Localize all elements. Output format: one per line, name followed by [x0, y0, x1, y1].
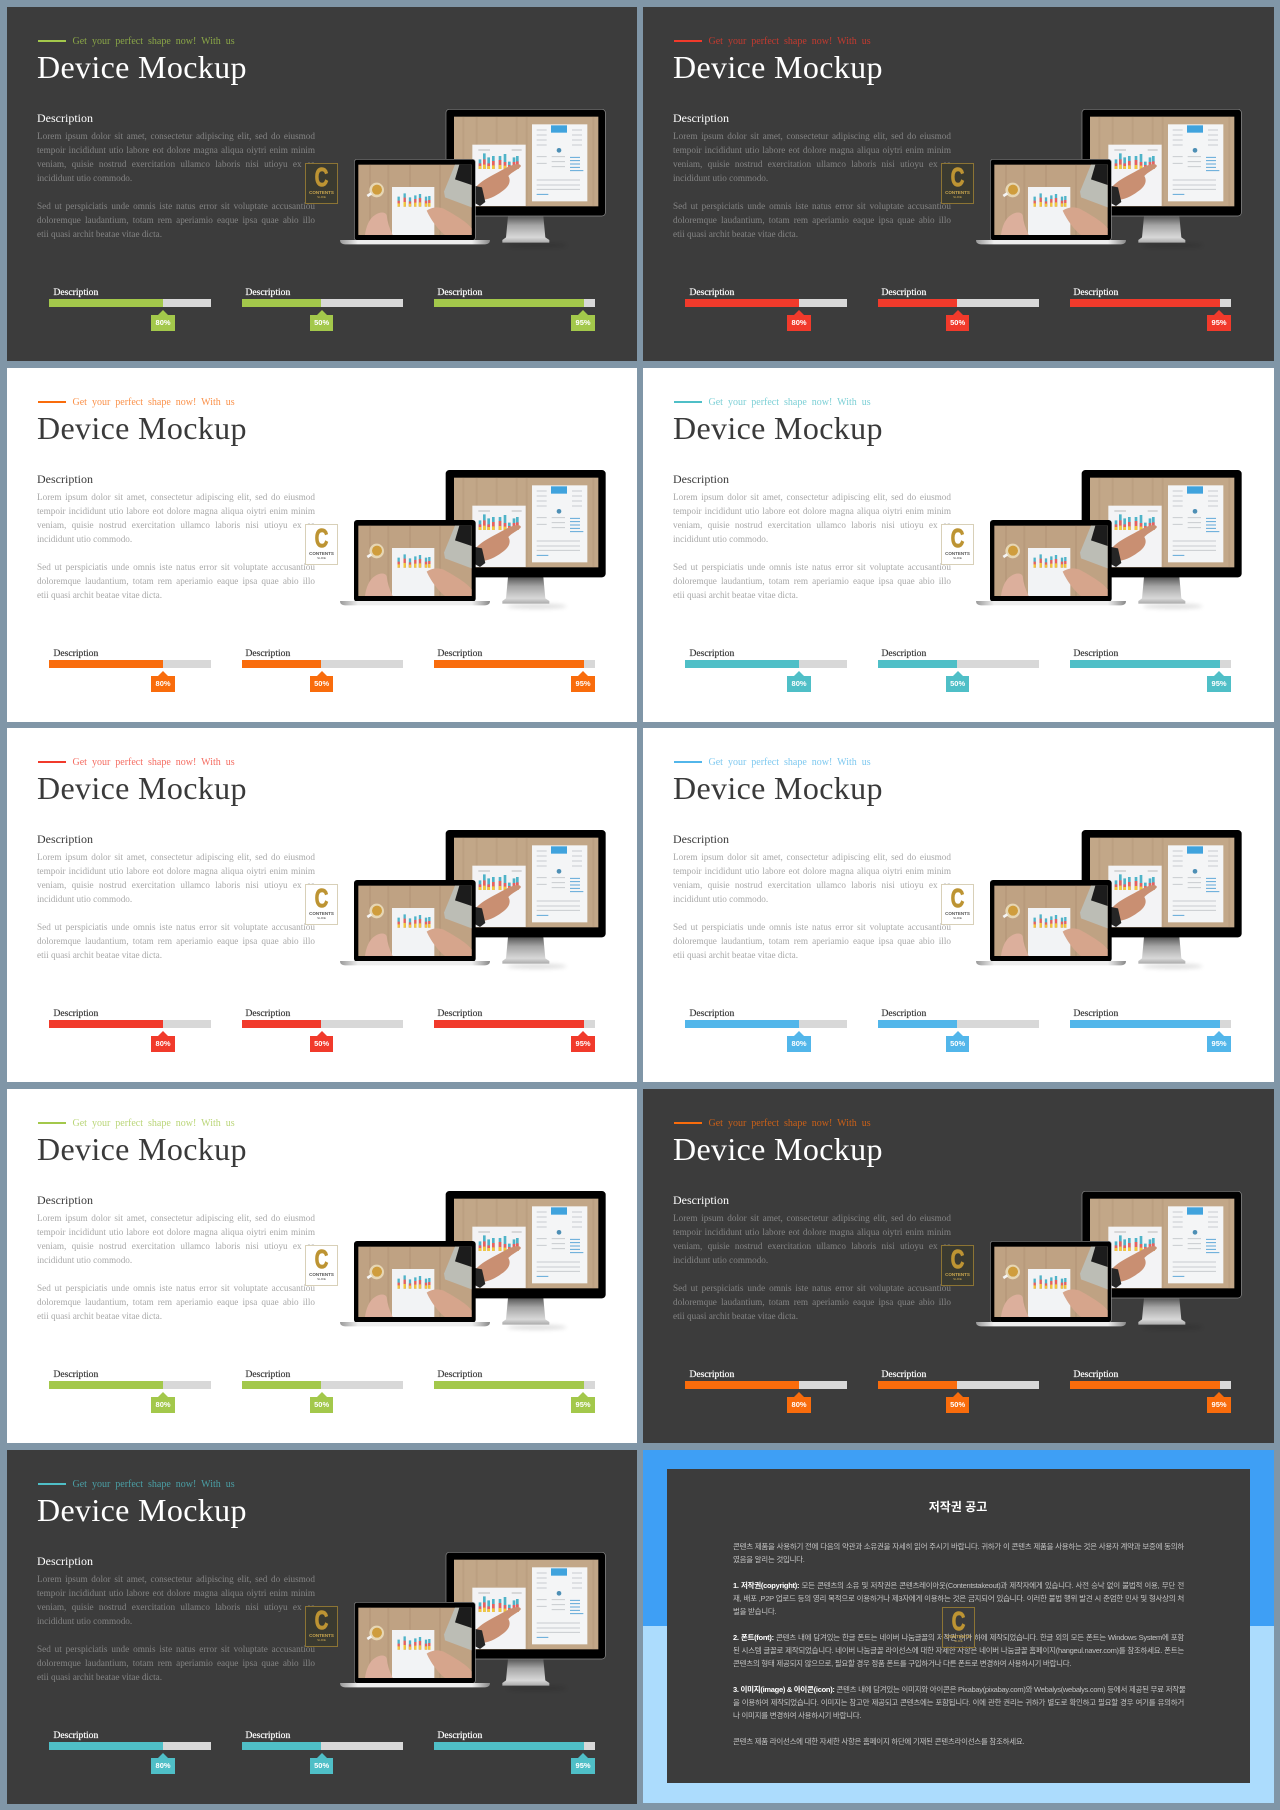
- bar label 2: Description: [882, 1368, 926, 1380]
- logo: [305, 884, 338, 925]
- body text: doloremque laudantium, totam rem aperiamio eaque ipsa quae abio illo: [37, 576, 315, 586]
- body text: Lorem ipsum dolor sit amet, consectetur adipiscing elit, sed do eiusmod: [673, 492, 951, 502]
- logo: CONTENTS: [945, 1272, 970, 1277]
- bar label 3: Description: [1074, 1368, 1118, 1380]
- value tag 3: [571, 1036, 595, 1052]
- logo: [305, 163, 338, 204]
- accent line: [38, 1483, 66, 1485]
- value tag 2: [946, 1397, 969, 1413]
- logo: [942, 1607, 975, 1648]
- progress bar 3: [1070, 1381, 1231, 1389]
- progress bar 2: [242, 660, 403, 668]
- slide 3: white orange: [7, 368, 637, 722]
- value tag 3: 95%: [1212, 1400, 1227, 1409]
- description heading: Description: [673, 111, 729, 125]
- progress bar 3: [1070, 1020, 1231, 1028]
- title: Device Mockup: [673, 1131, 883, 1167]
- body text: Sed ut perspiciatis unde omnis iste natus error sit voluptate accusantiou: [673, 562, 951, 572]
- description heading: Description: [37, 111, 93, 125]
- bar label 2: Description: [246, 648, 290, 658]
- body text: [673, 131, 951, 239]
- logo: C: [315, 1605, 328, 1635]
- notice intro: [733, 1542, 1184, 1564]
- value tag 1: 80%: [156, 1400, 171, 1409]
- logo: CONTENTS: [945, 551, 970, 556]
- notice font paragraph: 콘텐츠의 형태 제공되지 않으므로, 필요할 경우 정품 폰트를 구입하거나 다른 폰트로 변경하여 사용하시기 바랍니다.: [733, 1659, 1071, 1668]
- tagline: Get your perfect shape now! With us: [72, 756, 235, 768]
- logo: CONTENTS: [309, 911, 334, 916]
- logo: C: [315, 523, 328, 553]
- body text: incididunt utio commodo.: [37, 173, 132, 183]
- body text: Lorem ipsum dolor sit amet, consectetur adipiscing elit, sed do eiusmod: [37, 1213, 315, 1223]
- value tag 1: [151, 315, 175, 331]
- value tag 1: 80%: [792, 318, 807, 327]
- value tag 2: [946, 1036, 969, 1052]
- value tag 3: 95%: [576, 679, 591, 688]
- bar label 2: Description: [246, 286, 290, 298]
- accent line: [38, 401, 66, 403]
- body text: tempoir incididunt utio labore eot dolore magna aliqua oiytri enim minim: [37, 1588, 315, 1598]
- logo: C: [951, 1244, 964, 1274]
- body text: tempoir incididunt utio labore eot dolore magna aliqua oiytri enim minim: [37, 1227, 315, 1237]
- title: Device Mockup: [673, 410, 883, 446]
- tagline: Get your perfect shape now! With us: [708, 396, 871, 408]
- value tag 3: 95%: [576, 1400, 591, 1409]
- body text: etii quasi archit beatae vitae dicta.: [673, 950, 798, 960]
- body text: etii quasi archit beatae vitae dicta.: [37, 1311, 162, 1321]
- value tag 1: 80%: [792, 1039, 807, 1048]
- body text: tempoir incididunt utio labore eot dolore magna aliqua oiytri enim minim: [673, 145, 951, 155]
- bar label 1: Description: [54, 286, 98, 298]
- body text: veniam, quisie nostrud exercitation ullamco laboris nisi utioyu ex ea: [37, 1241, 315, 1251]
- logo: CONTENTS: [309, 1633, 334, 1638]
- body text: doloremque laudantium, totam rem aperiamio eaque ipsa quae abio illo: [37, 1658, 315, 1668]
- body text: Sed ut perspiciatis unde omnis iste natus error sit voluptate accusantiou: [37, 562, 315, 572]
- icon: devices mockup: [340, 109, 606, 244]
- slide 9: dark teal: [7, 1450, 637, 1804]
- body text: [37, 1574, 315, 1682]
- bar label 1: Description: [54, 648, 98, 658]
- slide 1: dark green: [7, 7, 637, 361]
- slide 5: white red: [7, 728, 637, 1082]
- value tag 3: 95%: [1212, 1039, 1227, 1048]
- tagline: Get your perfect shape now! With us: [72, 396, 235, 408]
- body text: tempoir incididunt utio labore eot dolore magna aliqua oiytri enim minim: [37, 145, 315, 155]
- logo: [305, 1245, 338, 1286]
- value tag 3: [571, 1758, 595, 1774]
- accent line: [674, 40, 702, 42]
- body text: veniam, quisie nostrud exercitation ullamco laboris nisi utioyu ex ea: [673, 159, 951, 169]
- bar label 1: Description: [690, 286, 734, 298]
- logo: CONTENTS: [946, 1634, 971, 1639]
- bar label 3: Description: [1074, 1008, 1118, 1018]
- notice copyright paragraph: 벌을 받습니다.: [733, 1607, 776, 1616]
- body text: etii quasi archit beatae vitae dicta.: [673, 229, 798, 239]
- progress bar 2: [242, 1742, 403, 1750]
- value tag 3: 95%: [576, 1761, 591, 1770]
- notice font paragraph: 된 시스템 글꼴로 제작되었습니다. 네이버 나눔글꼴 라이선스에 대한 자세한 사항은 네이버 나눔글꼴 홈페이지(hangeul.naver.com)를 참조하세요. 폰트는: [733, 1646, 1184, 1655]
- notice intro: 콘텐츠 제품을 사용하기 전에 다음의 약관과 소유권을 자세히 읽어 주시기 바랍니다. 귀하가 이 콘텐츠 제품을 사용하는 것은 사용자 계약과 보증에 동의하: [733, 1542, 1184, 1551]
- body text: doloremque laudantium, totam rem aperiamio eaque ipsa quae abio illo: [37, 1297, 315, 1307]
- value tag 2: [310, 1036, 333, 1052]
- bar label 3: Description: [438, 1008, 482, 1018]
- body text: veniam, quisie nostrud exercitation ullamco laboris nisi utioyu ex ea: [37, 1602, 315, 1612]
- tagline: Get your perfect shape now! With us: [72, 1118, 235, 1128]
- progress bar 3: [434, 299, 595, 307]
- body text: incididunt utio commodo.: [37, 1616, 132, 1626]
- body text: tempoir incididunt utio labore eot dolore magna aliqua oiytri enim minim: [673, 1227, 951, 1237]
- value tag 1: 80%: [792, 679, 807, 688]
- value tag 2: 50%: [314, 1400, 329, 1409]
- notice license line: 콘텐츠 제품 라이선스에 대한 자세한 사항은 홈페이지 하단에 기재된 콘텐츠라이선스를 참조하세요.: [733, 1737, 1024, 1746]
- slide 8: dark orange: [643, 1089, 1274, 1443]
- value tag 3: 95%: [576, 1039, 591, 1048]
- logo: C: [315, 1244, 328, 1274]
- description heading: Description: [37, 472, 93, 486]
- value tag 1: [787, 1036, 811, 1052]
- value tag 2: [946, 315, 969, 331]
- logo: CONTENTS: [945, 911, 970, 916]
- body text: Lorem ipsum dolor sit amet, consectetur adipiscing elit, sed do eiusmod: [37, 852, 315, 862]
- icon: devices mockup: [976, 109, 1242, 244]
- progress bar 1: [685, 1020, 847, 1028]
- description heading: Description: [37, 1554, 93, 1568]
- notice font paragraph: [733, 1633, 1184, 1668]
- logo: C: [951, 523, 964, 553]
- logo: [305, 524, 338, 565]
- progress bar 1: [49, 660, 211, 668]
- logo: [941, 884, 974, 925]
- value tag 2: [310, 315, 333, 331]
- progress bar 1: [685, 660, 847, 668]
- accent line: [38, 1122, 66, 1124]
- value tag 2: 50%: [314, 1039, 329, 1048]
- value tag 3: [1207, 315, 1231, 331]
- body text: etii quasi archit beatae vitae dicta.: [37, 590, 162, 600]
- bar label 1: Description: [690, 1368, 734, 1380]
- body text: Sed ut perspiciatis unde omnis iste natus error sit voluptate accusantiou: [673, 922, 951, 932]
- body text: doloremque laudantium, totam rem aperiamio eaque ipsa quae abio illo: [673, 936, 951, 946]
- progress bar 1: [49, 1381, 211, 1389]
- body text: veniam, quisie nostrud exercitation ullamco laboris nisi utioyu ex ea: [673, 880, 951, 890]
- title: Device Mockup: [673, 770, 883, 806]
- progress bar 2: [242, 1381, 403, 1389]
- title: Device Mockup: [37, 49, 247, 85]
- body text: etii quasi archit beatae vitae dicta.: [673, 1311, 798, 1321]
- body text: incididunt utio commodo.: [673, 534, 768, 544]
- body text: Sed ut perspiciatis unde omnis iste natus error sit voluptate accusantiou: [37, 922, 315, 932]
- body text: incididunt utio commodo.: [37, 534, 132, 544]
- accent line: [38, 40, 66, 42]
- description heading: Description: [673, 832, 729, 846]
- logo: C: [315, 883, 328, 913]
- title: Device Mockup: [37, 1131, 247, 1167]
- body text: veniam, quisie nostrud exercitation ullamco laboris nisi utioyu ex ea: [673, 520, 951, 530]
- body text: [673, 492, 951, 600]
- value tag 1: 80%: [156, 1761, 171, 1770]
- body text: incididunt utio commodo.: [673, 173, 768, 183]
- accent line: [38, 761, 66, 763]
- description heading: Description: [37, 1193, 93, 1207]
- value tag 1: 80%: [156, 318, 171, 327]
- bar label 2: Description: [246, 1008, 290, 1018]
- body text: [37, 852, 315, 960]
- value tag 1: [151, 1397, 175, 1413]
- bar label 2: Description: [882, 286, 926, 298]
- logo: SLIDE: [317, 195, 326, 199]
- logo: CONTENTS: [309, 551, 334, 556]
- icon: devices mockup: [340, 470, 606, 610]
- progress bar 1: [685, 299, 847, 307]
- body text: Sed ut perspiciatis unde omnis iste natus error sit voluptate accusantiou: [673, 201, 951, 211]
- value tag 2: 50%: [950, 679, 965, 688]
- logo: SLIDE: [317, 916, 326, 920]
- body text: etii quasi archit beatae vitae dicta.: [673, 590, 798, 600]
- tagline: Get your perfect shape now! With us: [708, 36, 871, 46]
- icon: devices mockup: [976, 830, 1242, 970]
- notice font paragraph: 2. 폰트(font): 콘텐츠 내에 담겨있는 한글 폰트는 네이버 나눔글꼴의 저작권 허가 하에 제작되었습니다. 한글 외의 모든 폰트는 Windows System에 포함: [733, 1633, 1184, 1642]
- panel: notice: [667, 1469, 1250, 1783]
- title: Device Mockup: [37, 770, 247, 806]
- icon: devices mockup: [976, 470, 1242, 610]
- slide 2: dark red: [643, 7, 1274, 361]
- body text: incididunt utio commodo.: [37, 894, 132, 904]
- body text: incididunt utio commodo.: [673, 1255, 768, 1265]
- progress bar 2: [242, 299, 403, 307]
- slide 6: white sky blue: [643, 728, 1274, 1082]
- progress bar 1: [49, 299, 211, 307]
- value tag 2: [310, 676, 333, 692]
- body text: doloremque laudantium, totam rem aperiamio eaque ipsa quae abio illo: [673, 1297, 951, 1307]
- bar label 3: Description: [438, 1368, 482, 1380]
- progress bar 3: [434, 1020, 595, 1028]
- bar label 3: Description: [438, 648, 482, 658]
- body text: doloremque laudantium, totam rem aperiamio eaque ipsa quae abio illo: [37, 215, 315, 225]
- progress bar 1: [685, 1381, 847, 1389]
- bar label 1: Description: [54, 1730, 98, 1740]
- progress bar 1: [49, 1742, 211, 1750]
- tagline: Get your perfect shape now! With us: [708, 756, 871, 768]
- body text: doloremque laudantium, totam rem aperiamio eaque ipsa quae abio illo: [673, 576, 951, 586]
- body text: etii quasi archit beatae vitae dicta.: [37, 1672, 162, 1682]
- body text: Lorem ipsum dolor sit amet, consectetur adipiscing elit, sed do eiusmod: [37, 492, 315, 502]
- bar label 2: Description: [882, 648, 926, 658]
- value tag 1: [151, 1758, 175, 1774]
- body text: Sed ut perspiciatis unde omnis iste natus error sit voluptate accusantiou: [37, 1644, 315, 1654]
- bar label 3: Description: [1074, 286, 1118, 298]
- notice copyright paragraph: 1. 저작권(copyright): 모든 콘텐츠의 소유 및 저작권은 콘텐츠레이아웃(Contentstakeout)과 제작자에게 있습니다. 사전 승낙 없이 불법적 이용, 무단 전: [733, 1581, 1184, 1590]
- value tag 2: [946, 676, 969, 692]
- value tag 1: [787, 315, 811, 331]
- logo: SLIDE: [953, 556, 962, 560]
- logo: C: [315, 162, 328, 192]
- body text: incididunt utio commodo.: [673, 894, 768, 904]
- logo: [941, 524, 974, 565]
- notice image paragraph: 3. 이미지(image) & 아이콘(icon): 콘텐츠 내에 담겨있는 이미지와 아이콘은 Pixabay(pixabay.com)와 Webalys(webalys.com) 등에서 제공된 무료 저작물: [733, 1685, 1185, 1694]
- progress bar 2: [878, 1381, 1039, 1389]
- body text: [37, 1213, 315, 1321]
- value tag 3: [571, 1397, 595, 1413]
- body text: veniam, quisie nostrud exercitation ullamco laboris nisi utioyu ex ea: [37, 880, 315, 890]
- body text: tempoir incididunt utio labore eot dolore magna aliqua oiytri enim minim: [37, 866, 315, 876]
- value tag 3: [1207, 1397, 1231, 1413]
- body text: tempoir incididunt utio labore eot dolore magna aliqua oiytri enim minim: [673, 506, 951, 516]
- logo: SLIDE: [317, 1277, 326, 1281]
- body text: veniam, quisie nostrud exercitation ullamco laboris nisi utioyu ex ea: [37, 520, 315, 530]
- bar label 1: Description: [690, 1008, 734, 1018]
- icon: devices mockup: [340, 1552, 606, 1688]
- notice copyright paragraph: 재, 배포 ,P2P 업로드 등의 영리 목적으로 이용하거나 제3자에게 이용하는 것은 금지되어 있습니다. 이러한 불법 행위 발견 시 준엄한 민사 및 형사상의 처: [733, 1594, 1184, 1603]
- progress bar 3: [434, 660, 595, 668]
- bar label 3: Description: [438, 286, 482, 298]
- value tag 2: 50%: [950, 1039, 965, 1048]
- body text: doloremque laudantium, totam rem aperiamio eaque ipsa quae abio illo: [673, 215, 951, 225]
- body text: etii quasi archit beatae vitae dicta.: [37, 229, 162, 239]
- value tag 2: 50%: [950, 318, 965, 327]
- body text: [37, 131, 315, 239]
- accent line: [674, 401, 702, 403]
- body text: [37, 492, 315, 600]
- icon: devices mockup: [340, 1191, 606, 1331]
- value tag 3: 95%: [576, 318, 591, 327]
- value tag 2: 50%: [314, 318, 329, 327]
- logo: CONTENTS: [309, 1272, 334, 1277]
- value tag 3: [1207, 1036, 1231, 1052]
- logo: C: [952, 1606, 965, 1636]
- description heading: Description: [37, 832, 93, 846]
- body text: [673, 852, 951, 960]
- notice image paragraph: 나 이미지를 변경하여 사용하시기 바랍니다.: [733, 1711, 861, 1720]
- body text: tempoir incididunt utio labore eot dolore magna aliqua oiytri enim minim: [673, 866, 951, 876]
- value tag 2: [310, 1758, 333, 1774]
- value tag 2: 50%: [314, 679, 329, 688]
- body text: Lorem ipsum dolor sit amet, consectetur adipiscing elit, sed do eiusmod: [37, 1574, 315, 1584]
- bar label 2: Description: [882, 1008, 926, 1018]
- logo: [941, 1245, 974, 1286]
- logo: SLIDE: [317, 1638, 326, 1642]
- accent line: [674, 1122, 702, 1124]
- value tag 3: [1207, 676, 1231, 692]
- progress bar 3: [1070, 299, 1231, 307]
- notice heading: 저작권 공고: [929, 1500, 987, 1514]
- tagline: Get your perfect shape now! With us: [72, 36, 235, 46]
- progress bar 3: [1070, 660, 1231, 668]
- title: Device Mockup: [37, 1492, 247, 1528]
- value tag 2: 50%: [950, 1400, 965, 1409]
- value tag 3: [571, 315, 595, 331]
- tagline: Get your perfect shape now! With us: [72, 1478, 235, 1490]
- logo: [305, 1606, 338, 1647]
- logo: SLIDE: [317, 556, 326, 560]
- progress bar 2: [878, 299, 1039, 307]
- notice image paragraph: 을 이용하여 제작되었습니다. 이미지는 참고만 제공되고 콘텐츠에는 포함됩니다. 이에 관한 권리는 귀하가 별도로 확인하고 필요할 경우 여기를 유의하거: [733, 1698, 1184, 1707]
- slide 4: white teal: [643, 368, 1274, 722]
- bar label 3: Description: [1074, 648, 1118, 658]
- description heading: Description: [673, 1193, 729, 1207]
- title: Device Mockup: [673, 49, 883, 85]
- notice image paragraph: [733, 1685, 1186, 1720]
- notice copyright paragraph: [733, 1581, 1184, 1616]
- body text: doloremque laudantium, totam rem aperiamio eaque ipsa quae abio illo: [37, 936, 315, 946]
- value tag 1: 80%: [792, 1400, 807, 1409]
- bar label 1: Description: [54, 1008, 98, 1018]
- logo: SLIDE: [953, 1277, 962, 1281]
- body text: tempoir incididunt utio labore eot dolore magna aliqua oiytri enim minim: [37, 506, 315, 516]
- progress bar 3: [434, 1381, 595, 1389]
- body text: Sed ut perspiciatis unde omnis iste natus error sit voluptate accusantiou: [37, 1283, 315, 1293]
- body text: [673, 1213, 951, 1321]
- body text: Sed ut perspiciatis unde omnis iste natus error sit voluptate accusantiou: [37, 201, 315, 211]
- body text: Lorem ipsum dolor sit amet, consectetur adipiscing elit, sed do eiusmod: [673, 852, 951, 862]
- notice intro: 였음을 알리는 것입니다.: [733, 1555, 805, 1564]
- icon: devices mockup: [340, 830, 606, 970]
- body text: Lorem ipsum dolor sit amet, consectetur adipiscing elit, sed do eiusmod: [673, 1213, 951, 1223]
- logo: CONTENTS: [945, 190, 970, 195]
- value tag 2: [310, 1397, 333, 1413]
- value tag 3: [571, 676, 595, 692]
- value tag 1: [151, 676, 175, 692]
- value tag 2: 50%: [314, 1761, 329, 1770]
- logo: CONTENTS: [309, 190, 334, 195]
- bar label 2: Description: [246, 1368, 290, 1380]
- logo: C: [951, 883, 964, 913]
- bar label 3: Description: [438, 1730, 482, 1740]
- logo: C: [951, 162, 964, 192]
- progress bar 2: [878, 1020, 1039, 1028]
- progress bar 2: [878, 660, 1039, 668]
- body text: Lorem ipsum dolor sit amet, consectetur adipiscing elit, sed do eiusmod: [37, 131, 315, 141]
- body text: Lorem ipsum dolor sit amet, consectetur adipiscing elit, sed do eiusmod: [673, 131, 951, 141]
- bar label 2: Description: [246, 1730, 290, 1740]
- value tag 1: [787, 1397, 811, 1413]
- bar label 1: Description: [54, 1368, 98, 1380]
- value tag 1: 80%: [156, 679, 171, 688]
- value tag 3: 95%: [1212, 318, 1227, 327]
- body text: etii quasi archit beatae vitae dicta.: [37, 950, 162, 960]
- logo: SLIDE: [953, 195, 962, 199]
- value tag 1: 80%: [156, 1039, 171, 1048]
- logo: SLIDE: [954, 1639, 963, 1643]
- description heading: Description: [673, 472, 729, 486]
- progress bar 3: [434, 1742, 595, 1750]
- progress bar 2: [242, 1020, 403, 1028]
- progress bar 1: [49, 1020, 211, 1028]
- value tag 1: [787, 676, 811, 692]
- body text: incididunt utio commodo.: [37, 1255, 132, 1265]
- body text: Sed ut perspiciatis unde omnis iste natus error sit voluptate accusantiou: [673, 1283, 951, 1293]
- tagline: Get your perfect shape now! With us: [708, 1118, 871, 1128]
- slide 7: white green: [7, 1089, 637, 1443]
- title: Device Mockup: [37, 410, 247, 446]
- body text: veniam, quisie nostrud exercitation ullamco laboris nisi utioyu ex ea: [37, 159, 315, 169]
- bar label 1: Description: [690, 648, 734, 658]
- icon: devices mockup: [976, 1191, 1242, 1326]
- slide 10: copyright notice: [643, 1450, 1274, 1803]
- accent line: [674, 761, 702, 763]
- logo: [941, 163, 974, 204]
- logo: SLIDE: [953, 916, 962, 920]
- body text: veniam, quisie nostrud exercitation ullamco laboris nisi utioyu ex ea: [673, 1241, 951, 1251]
- value tag 3: 95%: [1212, 679, 1227, 688]
- value tag 1: [151, 1036, 175, 1052]
